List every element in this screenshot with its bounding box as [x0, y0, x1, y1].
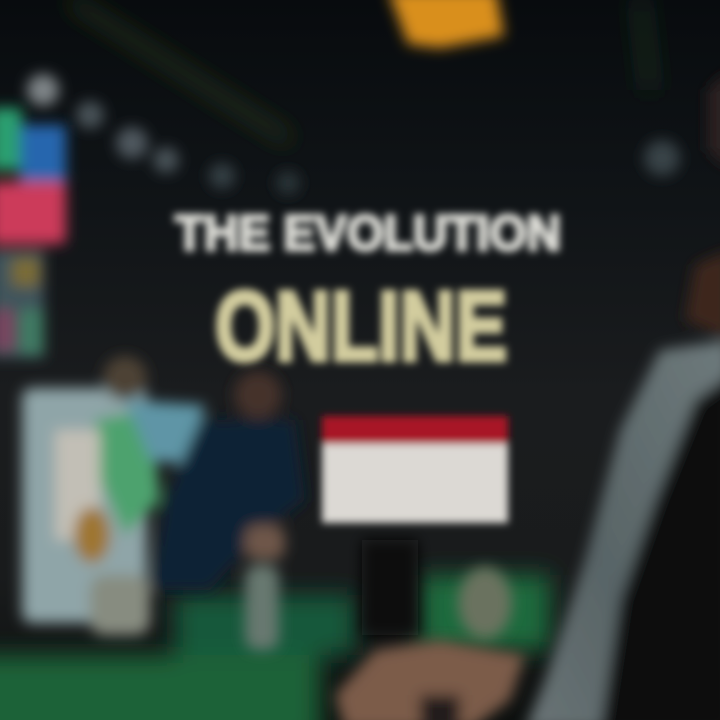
navy player — [150, 420, 305, 590]
title: THE EVOLUTION — [175, 205, 561, 261]
dark post — [362, 540, 418, 635]
icon: orange emblem — [388, 0, 504, 48]
foreground person at bottom — [335, 640, 525, 720]
white phone panel — [22, 388, 147, 623]
foreground person at right — [525, 70, 720, 720]
group of players at left — [22, 356, 305, 650]
panel: colourful app tiles — [0, 108, 66, 358]
row of dots — [27, 74, 680, 195]
heading: online: ONLINE — [215, 271, 507, 381]
green pitch — [0, 575, 550, 720]
football — [458, 567, 512, 639]
legs — [245, 525, 285, 560]
card: red and white sign — [322, 416, 508, 523]
gold shorts — [74, 507, 110, 563]
white shirt — [55, 430, 100, 540]
ceiling light streaks — [70, 0, 650, 140]
players' heads — [103, 356, 147, 400]
light blue shirt — [125, 400, 205, 465]
green shirt — [95, 410, 160, 535]
